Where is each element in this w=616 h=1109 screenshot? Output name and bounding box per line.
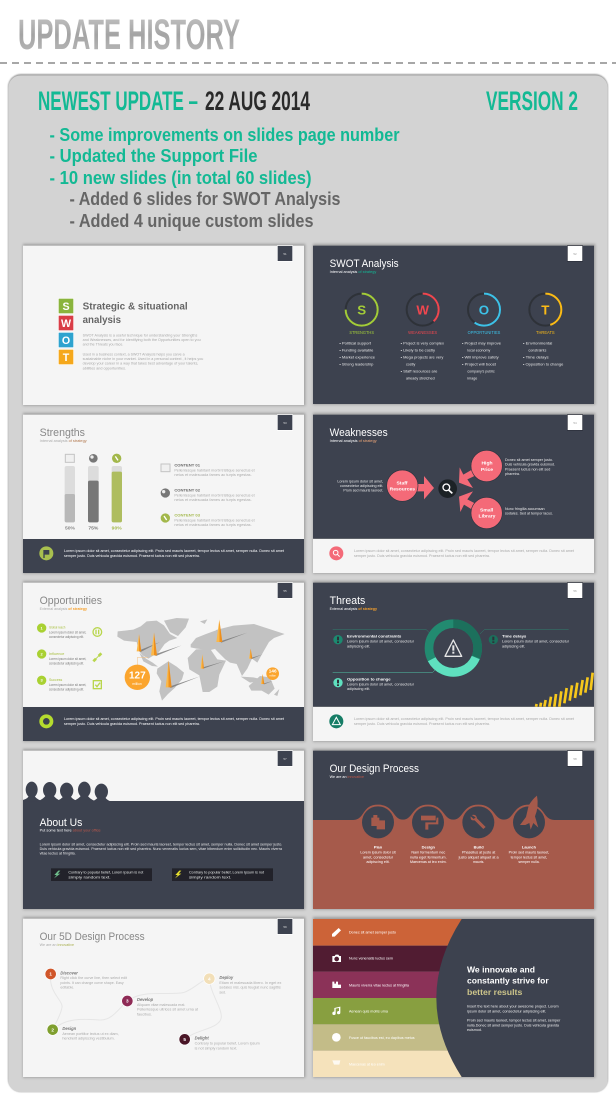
- threat items: adipiscing elit.: [347, 644, 370, 648]
- bar chart: 50%: [65, 525, 76, 531]
- bubble labels: Resources: [390, 487, 415, 493]
- slide body text: Used in a business context, a SWOT Analysis helps you carve a: [83, 352, 185, 356]
- panel heading: better results: [467, 987, 523, 997]
- threat items: Time delays: [502, 633, 527, 638]
- update list: - Added 4 unique custom slides: [70, 210, 314, 231]
- bullet lists: • Environmental: [523, 341, 553, 345]
- callout: 146 million: 146: [269, 669, 277, 674]
- node descriptions: Etiam et malesuada libero. In eget ex: [219, 981, 282, 985]
- panel heading: constantly strive for: [467, 976, 549, 986]
- bullet lists: image: [467, 376, 477, 380]
- process labels: Nam fermentum nec: [411, 851, 446, 855]
- footer band: [23, 539, 304, 573]
- numbered list: Global reach: [49, 626, 65, 630]
- dark curved panel: [436, 919, 594, 1077]
- process labels: Maecenas at leo enim.: [410, 860, 447, 864]
- process labels: nulla eget fermentum.: [410, 855, 447, 859]
- callout texts: Praesent luctus non elit sed: [505, 467, 550, 471]
- node labels: Discover: [60, 970, 78, 975]
- band icons: [332, 928, 341, 1065]
- footer band: semper justo. Duis vehicula gravida euismod. Praesent luctus non elit sed pharetra.: [354, 722, 490, 726]
- node numbers: 3: [126, 999, 129, 1004]
- panel body text: [467, 1005, 561, 1032]
- callout: 127 million: million: [132, 682, 142, 686]
- ring labels: THREATS: [536, 330, 555, 335]
- center search icon: [438, 479, 457, 498]
- bullet lists: costly: [406, 362, 416, 366]
- slide heading: Strengths: [40, 427, 85, 439]
- bar chart: 75%: [88, 525, 99, 531]
- bullet lists: • Strong leadership: [339, 362, 373, 366]
- bar chart: [65, 466, 122, 531]
- numbered list: consectetur adipiscing elit.: [49, 635, 84, 639]
- slide body text: and the Threats you face.: [83, 343, 123, 347]
- bullet lists: • Opposition to change: [523, 362, 563, 366]
- numbered list: 2: [41, 651, 44, 656]
- node descriptions: Pellentesque ultrices sit amet urna at: [137, 1008, 198, 1012]
- callout texts: Duis vehicula gravida euismod.: [505, 463, 555, 467]
- connector lines: [333, 629, 569, 672]
- threat items: [333, 633, 570, 691]
- threat items: Opposition to change: [347, 676, 391, 681]
- footer band: [313, 707, 594, 741]
- slide: Opportunities: 55: [283, 589, 287, 593]
- slide: SWOT analysis: 52: [573, 252, 577, 256]
- process labels: tempor lectus sit amet,: [511, 855, 547, 859]
- node descriptions: Right click the curve line, then select edit: [60, 976, 127, 980]
- bubble labels: [390, 461, 496, 520]
- node descriptions: sodales nisl, quis feugiat nunc sagittis: [219, 986, 281, 990]
- footer band: semper justo. Duis vehicula gravida euismod. Praesent luctus non elit sed pharetra.: [354, 554, 490, 558]
- SWOT letter blocks: O: [62, 335, 70, 347]
- process labels: Plan: [374, 845, 383, 850]
- process labels: amet, consectetur: [363, 855, 394, 859]
- body text: Lorem ipsum dolor sit amet, consectetur adipiscing elit. Proin sed mauris laoreet, tempor lectus sit amet, semper nulla. Donec sit amet semper justo.: [40, 842, 282, 846]
- node labels: Design: [62, 1026, 77, 1031]
- slide heading: [330, 763, 419, 779]
- slide: Weaknesses: [313, 413, 595, 574]
- numbered list: consectetur adipiscing elit.: [49, 687, 84, 691]
- numbered list: Success: [49, 678, 62, 682]
- slide heading: Strategic & situational: [83, 302, 188, 313]
- numbered list: Lorem ipsum dolor sit amet,: [49, 683, 86, 687]
- panel heading: [467, 964, 549, 997]
- bullet lists: • Time delays: [523, 355, 549, 359]
- node descriptions: [60, 976, 282, 1050]
- slide heading: analysis: [83, 315, 121, 326]
- hazard stripes: [536, 673, 593, 707]
- ring letters: S: [357, 302, 366, 317]
- numbered list: Lorem ipsum dolor sit amet,: [49, 657, 86, 661]
- threat items: Environmental constraints: [347, 633, 402, 638]
- process labels: Launch: [522, 845, 537, 850]
- callout texts: [337, 458, 555, 516]
- slide: SWOT intro: 51: [283, 252, 287, 256]
- node descriptions: Aenean porttitor lectus ut ex diam,: [62, 1032, 119, 1036]
- callout boxes: Contrary to popular belief, Lorem Ipsum is not: [189, 871, 264, 875]
- SWOT letter blocks: T: [63, 352, 70, 364]
- bubble labels: Price: [481, 467, 493, 473]
- slide: Strengths: 53: [283, 421, 287, 425]
- heading: newest update: NEWEST UPDATE –: [38, 86, 198, 116]
- map pins: [137, 619, 273, 688]
- node labels: Delight: [195, 1036, 209, 1041]
- panel body text: Proin sed mauris laoreet, tempor lectus sit amet, semper: [467, 1019, 561, 1023]
- bubble labels: Staff: [396, 480, 408, 486]
- node descriptions: faucibus.: [137, 1012, 152, 1016]
- callout boxes: simply random text.: [189, 875, 231, 879]
- slide: Weaknesses: 54: [573, 421, 577, 425]
- node descriptions: points. It can change curve shape. Easy: [60, 981, 124, 985]
- slide heading: Weaknesses: [330, 427, 388, 439]
- update list: - Some improvements on slides page number: [50, 124, 400, 145]
- heading: date: 22 AUG 2014: [205, 86, 310, 116]
- threat items: Lorem ipsum dolor sit amet, consectetur: [347, 640, 415, 644]
- threat items: Lorem ipsum dolor sit amet, consectetur: [347, 682, 415, 686]
- slide: About Us: 57: [283, 757, 287, 761]
- slide heading: Put some text here about your office: [40, 829, 101, 833]
- SWOT letter blocks: [58, 298, 74, 365]
- slide body text: sustainable niche in your market. Used in a personal context , it helps you: [83, 357, 203, 361]
- slide heading: We are an innovative: [330, 775, 364, 779]
- bullet lists: • Market experience: [339, 355, 375, 359]
- ring labels: OPPORTUNITIES: [468, 330, 500, 335]
- bullet lists: • Project may improve: [462, 341, 501, 345]
- process labels: adipiscing elit.: [366, 860, 390, 864]
- slide body text: [83, 333, 203, 370]
- panel body text: Insert the text here about your awesome project. Lorem: [467, 1005, 559, 1009]
- slide body text: SWOT Analysis is a useful technique for understanding your Strengths: [83, 333, 198, 337]
- callout texts: Proin sed mauris laoreet.: [343, 489, 383, 493]
- footer band: [23, 707, 304, 741]
- process labels: Proin sed mauris laoreet,: [509, 851, 549, 855]
- node descriptions: is not simply random text.: [195, 1046, 237, 1050]
- footer band: Lorem ipsum dolor sit amet, consectetur adipiscing elit. Proin sed mauris laoreet, tempor lectus sit amet, semper nulla. Donec sit amet: [64, 549, 284, 553]
- callout texts: pharetra.: [505, 472, 520, 476]
- slide: Threats: 56: [573, 589, 577, 593]
- callout texts: sodales. Sed at tempor lacus.: [505, 512, 553, 516]
- callout texts: Donec sit amet semper justo.: [505, 458, 553, 462]
- update list: [50, 124, 400, 231]
- slide heading: Internal analysis of strategy: [40, 439, 87, 443]
- callout: 127 million: 127: [129, 670, 146, 681]
- slide heading: Opportunities: [40, 595, 102, 607]
- slide heading: External analysis of strategy: [330, 607, 377, 611]
- ring letters: O: [479, 302, 489, 317]
- numbered list: [37, 623, 86, 691]
- process labels: [360, 845, 549, 864]
- warning icon: [445, 640, 462, 656]
- threat items: adipiscing elit.: [502, 644, 525, 648]
- process path: [50, 974, 221, 1039]
- node labels: [60, 970, 234, 1041]
- process labels: Phasellus at justo at: [462, 851, 495, 855]
- content list: CONTENT 03: [174, 512, 201, 517]
- slide body text: abilities and opportunities.: [83, 366, 126, 370]
- bullet lists: local economy: [467, 348, 491, 352]
- slide heading: We are an innovative: [40, 943, 74, 947]
- numbered list: 1: [41, 625, 44, 630]
- numbered list: consectetur adipiscing elit.: [49, 661, 84, 665]
- slide: Opportunities: [23, 581, 305, 742]
- content list: Pellentesque habitant morbi tristique senectus et: [174, 468, 255, 472]
- bullet lists: • Mega projects are very: [401, 355, 444, 359]
- slide: SWOT intro: [23, 244, 305, 406]
- body text: vitae lectus at fringilla.: [40, 852, 76, 856]
- band labels: Nunc venenatis luctus sem: [349, 957, 393, 961]
- footer band: semper justo. Duis vehicula gravida euismod. Praesent luctus non elit sed pharetra.: [64, 722, 200, 726]
- node numbers: 4: [208, 976, 211, 981]
- bullet lists: • Project is very complex: [401, 341, 444, 345]
- ring letters: T: [541, 302, 549, 317]
- slide heading: External analysis of strategy: [40, 607, 87, 611]
- bullet lists: already stretched: [406, 376, 435, 380]
- bullet lists: • Project will boost: [462, 362, 496, 366]
- callout texts: consectetur adipiscing elit.: [340, 484, 383, 488]
- slide: Strengths: [23, 413, 305, 574]
- panel body text: nulla.Donec sit amet semper justo. Duis vehicula gravida: [467, 1023, 559, 1027]
- numbered list: Influence: [49, 652, 64, 656]
- title: UPDATE HISTORY: [18, 11, 240, 59]
- slide heading: Threats: [330, 595, 366, 607]
- slide heading: Internal analysis of strategy: [330, 270, 377, 274]
- bullet lists: • Staff resources are: [401, 369, 437, 373]
- bubble labels: High: [481, 461, 493, 467]
- node descriptions: Contrary to popular belief, Lorem Ipsum: [195, 1042, 260, 1046]
- slide: SWOT analysis: [313, 244, 595, 405]
- node numbers: 5: [183, 1037, 186, 1042]
- callout texts: Lorem ipsum dolor sit amet,: [337, 479, 383, 483]
- node numbers: 2: [51, 1027, 54, 1032]
- process icons: [371, 796, 538, 830]
- bubble labels: Small: [480, 507, 494, 513]
- content list: [161, 462, 255, 527]
- panel body text: ipsum dolor sit amet, consectetur adipiscing elit.: [467, 1009, 546, 1013]
- arrows: [410, 467, 480, 512]
- bullet lists: • Likely to be costly: [401, 348, 435, 352]
- slide body text: develop your career in a way that takes best advantage of your talents,: [83, 362, 198, 366]
- process nodes: [45, 968, 215, 1045]
- bullet lists: • Will improve safety: [462, 355, 499, 359]
- footer band: Lorem ipsum dolor sit amet, consectetur adipiscing elit. Proin sed mauris laoreet, tempor lectus sit amet, semper nulla. Donec sit amet: [64, 717, 284, 721]
- ring labels: STRENGTHS: [349, 330, 374, 335]
- band labels: Aenean quis mollis urna: [349, 1009, 388, 1013]
- bubble labels: Library: [479, 514, 496, 520]
- bubbles: [387, 450, 502, 529]
- slide: We innovate: [313, 917, 595, 1078]
- slide heading: [330, 258, 399, 274]
- numbered list: 3: [41, 678, 44, 683]
- bullet lists: constraints: [528, 348, 547, 352]
- update list: - Updated the Support File: [50, 145, 258, 166]
- slide heading: Internal analysis of strategy: [330, 439, 377, 443]
- donut chart: [421, 616, 485, 680]
- panel body text: euismod.: [467, 1028, 482, 1032]
- threat items: Lorem ipsum dolor sit amet, consectetur: [502, 640, 570, 644]
- bullet lists: company's public: [467, 369, 495, 373]
- threat items: adipiscing elit.: [347, 687, 370, 691]
- ring charts: [346, 294, 561, 326]
- slide heading: [330, 427, 388, 443]
- slide heading: [40, 931, 145, 947]
- ring labels: WEAKNESSES: [408, 330, 437, 335]
- body text: [40, 842, 282, 856]
- band labels: Fusce ut faucibus est, eu dapibus metus: [349, 1036, 415, 1040]
- band labels: [349, 931, 415, 1066]
- callout boxes: Contrary to popular belief, Lorem Ipsum is not: [68, 871, 143, 875]
- footer band: [313, 539, 594, 573]
- node numbers: 1: [49, 972, 52, 977]
- body text: Duis vehicula gravida euismod. Praesent luctus non elit sed pharetra. Nunc venenatis luctus sem, vitae bibendum enim sollicitudin nec. Mauris viverra: [40, 847, 282, 851]
- panel heading: We innovate and: [467, 964, 535, 974]
- ring labels: [349, 330, 555, 335]
- numbered list: Lorem ipsum dolor sit amet,: [49, 631, 86, 635]
- node descriptions: hendrerit adipiscing vestibulum.: [62, 1037, 115, 1041]
- band labels: Mauris viverra vitae lectus at fringilla: [349, 983, 409, 987]
- process labels: Lorem ipsum dolor sit: [360, 851, 396, 855]
- footer band: Lorem ipsum dolor sit amet, consectetur adipiscing elit. Proin sed mauris laoreet, tempor lectus sit amet, semper nulla. Donec sit amet: [354, 717, 574, 721]
- list icons: [93, 628, 102, 689]
- slide heading: Our 5D Design Process: [40, 931, 145, 943]
- slide heading: Our Design Process: [330, 763, 419, 775]
- update list: - 10 new slides (in total 60 slides): [50, 167, 312, 188]
- slide heading: About Us: [40, 817, 83, 829]
- content list: netus et malesuada fames ac turpis egestas.: [174, 473, 252, 477]
- bar icons: [65, 454, 121, 463]
- content list: CONTENT 01: [174, 462, 201, 467]
- team silhouettes: [23, 782, 111, 802]
- footer band: Lorem ipsum dolor sit amet, consectetur adipiscing elit. Proin sed mauris laoreet, tempor lectus sit amet, semper nulla. Donec sit amet: [354, 549, 574, 553]
- callout: 127 million: [125, 657, 150, 690]
- slide: Our 5D Design Process: [23, 917, 305, 1078]
- bullet lists: [339, 341, 563, 380]
- SWOT letter blocks: W: [61, 318, 72, 330]
- colour bands: [313, 919, 466, 1077]
- bullet lists: • Funding available: [339, 348, 373, 352]
- slide: Our Design Process: [313, 749, 595, 910]
- process labels: Design: [422, 845, 436, 850]
- bullet lists: • Political support: [339, 341, 371, 345]
- node labels: Develop: [137, 997, 154, 1002]
- slide heading: [40, 817, 101, 833]
- node descriptions: sed.: [219, 990, 226, 994]
- process labels: semper nulla.: [518, 860, 540, 864]
- SWOT letter blocks: S: [62, 301, 70, 313]
- content list: Pellentesque habitant morbi tristique senectus et: [174, 493, 255, 497]
- world map: [117, 618, 285, 701]
- process circles: [362, 806, 545, 838]
- node labels: Deploy: [219, 975, 234, 980]
- slide heading: [330, 595, 377, 611]
- callout boxes: simply random text.: [68, 875, 111, 879]
- update list: - Added 6 slides for SWOT Analysis: [70, 188, 340, 209]
- slide: Our Design Process: 58: [573, 757, 577, 761]
- ring letters: [357, 302, 549, 317]
- content list: netus et malesuada fames ac turpis egestas.: [174, 498, 252, 502]
- bar chart: 90%: [112, 525, 122, 531]
- process labels: Build: [474, 845, 484, 850]
- callout: 146 million: million: [269, 676, 277, 678]
- node descriptions: editable.: [60, 986, 74, 990]
- wave background: [313, 805, 594, 909]
- callout boxes: [51, 868, 273, 881]
- slide: Our 5D Design Process: 59: [283, 925, 287, 929]
- process labels: mauris.: [473, 860, 484, 864]
- node descriptions: Aliquam vitae malesuada erat.: [137, 1003, 185, 1007]
- content list: netus et malesuada fames ac turpis egestas.: [174, 523, 252, 527]
- node numbers: [49, 972, 211, 1042]
- ring letters: W: [416, 302, 429, 317]
- callout texts: Nunc fringilla accumsan: [505, 507, 545, 511]
- band labels: Maecenas at leo enim: [349, 1062, 385, 1066]
- band labels: Donec sit amet semper justo: [349, 931, 396, 935]
- slide: Threats: [313, 581, 595, 742]
- content list: Pellentesque habitant morbi tristique senectus et: [174, 518, 255, 522]
- slide heading: [83, 302, 188, 326]
- slide body text: and Weaknesses, and for identifying both the Opportunities open to you: [83, 338, 201, 342]
- slide: About Us: [23, 749, 305, 910]
- callout: 146 million: [266, 667, 279, 680]
- process labels: justo aliquet aliquet at a: [458, 855, 499, 859]
- footer band: semper justo. Duis vehicula gravida euismod. Praesent luctus non elit sed pharetra.: [64, 554, 200, 558]
- slide heading: SWOT Analysis: [330, 258, 399, 270]
- content list: CONTENT 02: [174, 487, 201, 492]
